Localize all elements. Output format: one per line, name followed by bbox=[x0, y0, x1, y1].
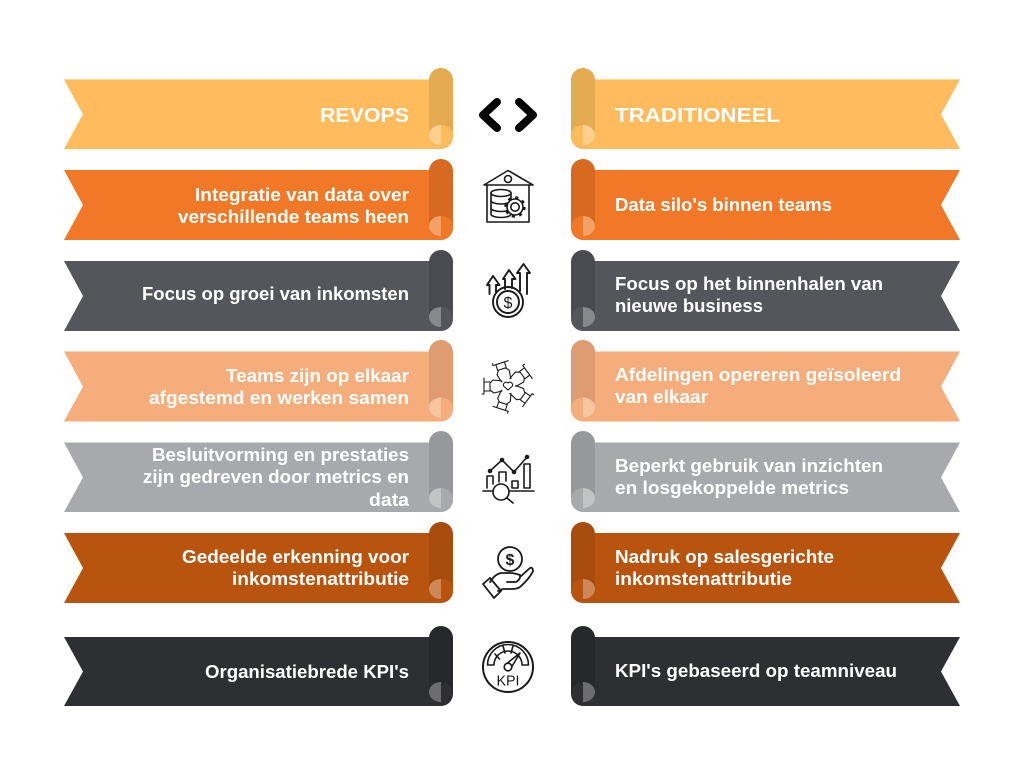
row 4 right: limited insights bbox=[571, 431, 960, 512]
row 2 right: new business bbox=[571, 250, 960, 331]
row 1 left: data integration: Integratie van data over bbox=[195, 185, 409, 205]
icon: KPI gauge bbox=[483, 642, 533, 692]
row 4 left: data-driven decisions: zijn gedreven door metrics en bbox=[143, 467, 409, 487]
row 3 left: aligned teams bbox=[64, 340, 453, 422]
row 3 right: isolated departments bbox=[571, 340, 960, 422]
row 5 right: sales attribution: inkomstenattributie bbox=[615, 569, 792, 589]
header ribbon: RevOps bbox=[64, 68, 453, 149]
row 5 left: shared attribution: Gedeelde erkenning voor bbox=[182, 547, 409, 567]
row 3 right: isolated departments: van elkaar bbox=[615, 387, 708, 407]
row 6 right: team-level KPIs bbox=[571, 626, 960, 706]
row 4 right: limited insights: Beperkt gebruik van inzichten bbox=[615, 456, 883, 476]
row 6 left: organisation-wide KPIs: Organisatiebrede KPI's bbox=[205, 662, 409, 682]
icon: hand holding coin bbox=[483, 547, 533, 598]
row 5 left: shared attribution: inkomstenattributie bbox=[232, 569, 409, 589]
row 4 left: data-driven decisions: Besluitvorming en prestaties bbox=[152, 445, 409, 465]
icon: code brackets bbox=[483, 102, 533, 128]
icon: hand holding coin: $ bbox=[506, 552, 515, 569]
header ribbon: Traditioneel: TRADITIONEEL bbox=[615, 105, 780, 127]
icon: KPI gauge: KPI bbox=[496, 674, 520, 690]
row 2 left: revenue growth bbox=[64, 250, 453, 331]
icon: growth arrows with coin: $ bbox=[504, 295, 513, 312]
row 2 left: revenue growth: Focus op groei van inkomsten bbox=[142, 284, 409, 304]
row 3 left: aligned teams: afgestemd en werken samen bbox=[149, 388, 409, 408]
row 4 left: data-driven decisions: data bbox=[369, 490, 410, 510]
header ribbon: RevOps: REVOPS bbox=[320, 105, 409, 127]
icon: team fists in a circle bbox=[482, 359, 534, 413]
row 6 left: organisation-wide KPIs bbox=[64, 626, 453, 706]
icon: data warehouse with gear bbox=[484, 170, 533, 222]
row 2 right: new business: Focus op het binnenhalen van bbox=[615, 274, 883, 294]
row 5 left: shared attribution bbox=[64, 522, 453, 603]
row 2 right: new business: nieuwe business bbox=[615, 296, 763, 316]
row 3 right: isolated departments: Afdelingen opereren geïsoleerd bbox=[615, 365, 901, 385]
header ribbon: Traditioneel bbox=[571, 68, 960, 149]
row 4 left: data-driven decisions bbox=[64, 431, 453, 512]
row 6 right: team-level KPIs: KPI's gebaseerd op teamniveau bbox=[615, 661, 897, 681]
icon: analytics chart with magnifier bbox=[483, 456, 534, 503]
icon: growth arrows with coin bbox=[487, 264, 530, 317]
row 5 right: sales attribution bbox=[571, 522, 960, 603]
row 1 left: data integration bbox=[64, 159, 453, 240]
row 5 right: sales attribution: Nadruk op salesgerichte bbox=[615, 547, 834, 567]
row 1 right: data silos: Data silo's binnen teams bbox=[615, 195, 832, 215]
row 4 right: limited insights: en losgekoppelde metrics bbox=[615, 478, 849, 498]
row 1 left: data integration: verschillende teams heen bbox=[178, 207, 409, 227]
row 1 right: data silos bbox=[571, 159, 960, 240]
row 3 left: aligned teams: Teams zijn op elkaar bbox=[226, 366, 409, 386]
